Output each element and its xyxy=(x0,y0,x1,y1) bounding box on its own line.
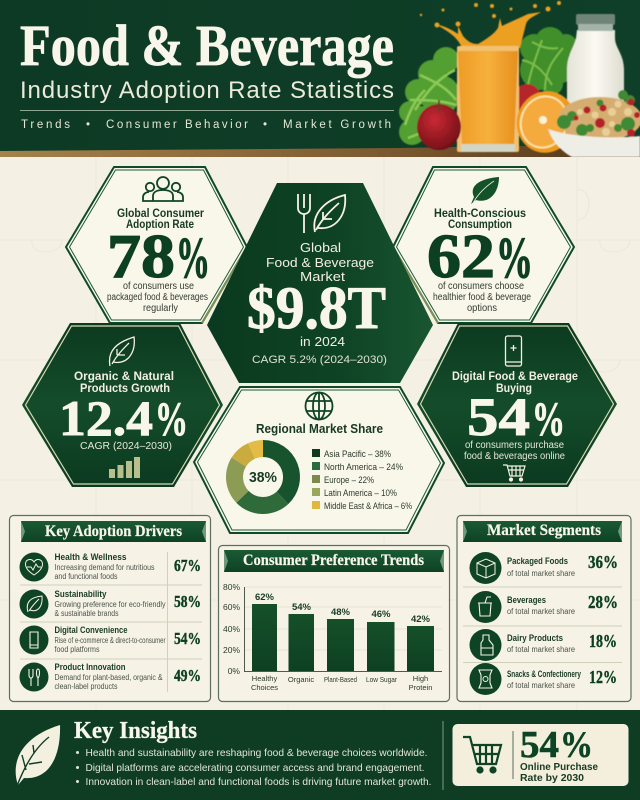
row: sustainability xyxy=(20,589,201,618)
panel: consumer preference trends xyxy=(218,546,450,702)
big number xyxy=(59,390,188,446)
donut centre value: 38% xyxy=(249,469,277,486)
lettuce left xyxy=(399,47,460,145)
row: dairy products xyxy=(470,629,617,661)
hexagon: digital buying xyxy=(417,323,617,487)
header tagline: • xyxy=(263,119,267,131)
description xyxy=(107,281,208,314)
insight bullets: Innovation in clean-label and functional foods is driving future market growth. xyxy=(86,776,432,788)
row: sustainability: Growing preference for eco-friendly xyxy=(54,600,166,609)
card title: Regional Market Share xyxy=(256,421,383,436)
row: snacks and confectionery: 12% xyxy=(589,667,617,687)
row: digital convenience: food platforms xyxy=(54,645,100,654)
header tagline xyxy=(21,119,391,131)
callout: online purchase rate: 54 xyxy=(520,724,559,766)
header tagline: Market Growth xyxy=(283,119,391,131)
bar chart: Low Sugar xyxy=(366,675,397,684)
hexagon: health-conscious consumption xyxy=(393,167,574,323)
description: of consumers choose xyxy=(438,281,524,292)
row: dairy products: 18% xyxy=(589,631,617,651)
hexagon: global consumer adoption rate xyxy=(66,167,247,323)
legend: Europe – 22% xyxy=(324,475,374,486)
big number xyxy=(107,223,210,291)
header tagline: Consumer Behavior xyxy=(106,119,248,131)
bar chart: Organic xyxy=(288,675,314,684)
card title: Food & Beverage xyxy=(266,255,374,270)
description: healthier food & beverage xyxy=(433,292,531,303)
card title xyxy=(74,371,174,395)
bowl xyxy=(548,129,640,157)
row: health and wellness: Increasing demand for nutritious xyxy=(54,563,154,572)
milk bottle xyxy=(567,14,624,112)
header subtitle: Industry Adoption Rate Statistics xyxy=(20,77,394,104)
card title: Market xyxy=(300,269,345,284)
banner heading xyxy=(224,550,444,572)
row: packaged foods: Packaged Foods xyxy=(507,556,568,566)
card title: Global xyxy=(300,240,341,255)
description: food & beverages online xyxy=(464,451,565,462)
row: digital convenience: 54% xyxy=(174,629,201,648)
big number: $9.8T xyxy=(247,275,386,341)
hexagon: global market xyxy=(207,183,433,383)
banner heading: Consumer Preference Trends xyxy=(243,552,424,569)
icon: globe xyxy=(306,392,332,420)
description xyxy=(433,281,531,314)
card title xyxy=(434,208,526,231)
icon: fork and leaf xyxy=(298,194,345,233)
legend: Latin America – 10% xyxy=(324,488,397,499)
big number: 12.4 xyxy=(59,390,153,446)
bar chart: Healthy xyxy=(252,674,277,683)
row: product innovation: 49% xyxy=(174,666,201,685)
legend: North America – 24% xyxy=(324,462,403,473)
row: health and wellness: and functional foods xyxy=(54,572,118,581)
CAGR note: CAGR (2024–2030) xyxy=(80,440,172,452)
juice glass xyxy=(457,46,519,152)
description: of consumers purchase xyxy=(465,440,564,451)
big number: 78 xyxy=(107,223,175,291)
callout: online purchase rate xyxy=(452,724,628,786)
bar chart: 48% xyxy=(331,607,351,618)
banner heading xyxy=(21,521,206,542)
row: dairy products: of total market share xyxy=(507,645,576,654)
icon: leaf xyxy=(16,725,60,786)
card title xyxy=(452,371,578,395)
hexagon: organic and natural growth xyxy=(22,323,223,487)
icon: cart xyxy=(503,465,525,481)
header title: Food & Beverage xyxy=(20,13,394,78)
row: product innovation: clean-label products xyxy=(54,682,118,691)
bar chart: 46% xyxy=(371,609,391,620)
row: health and wellness: Health & Wellness xyxy=(54,552,126,563)
row: sustainability: Sustainability xyxy=(54,589,107,600)
callout: online purchase rate: % xyxy=(560,725,593,766)
row: sustainability: 58% xyxy=(174,592,201,611)
apple back xyxy=(510,84,544,128)
bar chart: 80% xyxy=(223,582,240,592)
bar chart: High xyxy=(413,674,428,683)
bar chart: Choices xyxy=(251,683,278,692)
description: regularly xyxy=(143,303,178,314)
big number: % xyxy=(532,393,565,446)
card title: Buying xyxy=(496,383,532,395)
banner heading xyxy=(463,521,622,542)
big number: % xyxy=(155,393,188,446)
insight bullets: Digital platforms are accelerating consumer access and brand engagement. xyxy=(86,762,424,774)
row: packaged foods xyxy=(470,552,618,584)
icon: leaf xyxy=(471,177,499,204)
footer: key insights xyxy=(0,710,640,800)
juice splash xyxy=(420,1,561,48)
donut chart xyxy=(226,440,300,514)
legend: Middle East & Africa – 6% xyxy=(324,501,412,512)
row: snacks and confectionery: Snacks & Confectionery xyxy=(507,669,581,679)
header tagline: • xyxy=(86,119,90,131)
icon: bars xyxy=(109,457,140,478)
icon: phone xyxy=(506,336,522,366)
row: product innovation xyxy=(20,662,201,692)
description: packaged food & beverages xyxy=(107,292,208,303)
card title xyxy=(266,240,374,284)
bar chart: Protein xyxy=(409,683,432,692)
bar chart: 60% xyxy=(223,602,240,612)
card title: Health-Conscious xyxy=(434,208,526,220)
bar chart: 42% xyxy=(411,614,431,625)
header tagline: Trends xyxy=(21,119,70,131)
footer heading: Key Insights xyxy=(74,718,197,744)
bar chart: 54% xyxy=(292,602,312,613)
bar chart: 0% xyxy=(228,666,240,676)
card title: Adoption Rate xyxy=(126,219,194,231)
callout: online purchase rate: Online Purchase xyxy=(520,761,598,773)
row: digital convenience: Rise of e-commerce & direct-to-consumer xyxy=(54,636,166,645)
row: dairy products: Dairy Products xyxy=(507,633,563,643)
bar chart xyxy=(223,582,442,692)
row: product innovation: Product Innovation xyxy=(54,662,126,673)
apple front xyxy=(417,100,461,150)
card title xyxy=(117,208,204,231)
bar chart: 62% xyxy=(255,592,275,603)
big number xyxy=(467,387,565,447)
card title: Products Growth xyxy=(80,383,170,395)
bar chart: 40% xyxy=(223,624,240,634)
row: health and wellness xyxy=(20,552,201,582)
orange half xyxy=(508,83,584,161)
row: beverages: of total market share xyxy=(507,607,576,616)
row: health and wellness: 67% xyxy=(174,556,201,575)
card title: Organic & Natural xyxy=(74,371,174,383)
description: of consumers use xyxy=(123,281,194,292)
year: in 2024 xyxy=(300,334,345,349)
card title: Global Consumer xyxy=(117,208,204,220)
description: options xyxy=(467,303,497,314)
row: packaged foods: of total market share xyxy=(507,569,576,578)
food illustration xyxy=(399,1,640,161)
row: beverages: Beverages xyxy=(507,595,546,605)
row: sustainability: & sustainable brands xyxy=(54,609,118,618)
row: snacks and confectionery xyxy=(470,663,617,695)
header banner xyxy=(0,0,640,152)
legend xyxy=(312,449,412,512)
bar chart: Plant-Based xyxy=(324,675,357,684)
CAGR note: CAGR 5.2% (2024–2030) xyxy=(252,354,387,366)
big number xyxy=(427,223,533,291)
panel: market segments xyxy=(457,516,631,702)
big number: % xyxy=(176,225,210,290)
wooden table xyxy=(0,144,640,157)
row: beverages xyxy=(470,591,618,623)
row: digital convenience xyxy=(20,625,201,654)
row: digital convenience: Digital Convenience xyxy=(54,625,128,636)
panel: key adoption drivers xyxy=(10,516,210,702)
description xyxy=(464,440,565,462)
legend: Asia Pacific – 38% xyxy=(324,449,391,460)
big number: 54 xyxy=(467,387,530,447)
callout: online purchase rate: Rate by 2030 xyxy=(520,772,584,784)
salad xyxy=(557,90,640,141)
icon: leaf xyxy=(110,337,134,366)
icon: cart xyxy=(463,737,501,772)
card title: Consumption xyxy=(448,219,512,231)
lettuce right xyxy=(520,27,577,95)
bar chart: 20% xyxy=(223,645,240,655)
row: snacks and confectionery: of total market share xyxy=(507,681,576,690)
banner heading: Market Segments xyxy=(487,522,601,539)
icon: people xyxy=(143,177,183,201)
insight bullets xyxy=(76,747,432,788)
row: packaged foods: 36% xyxy=(588,552,618,572)
big number: % xyxy=(496,225,533,290)
banner heading: Key Adoption Drivers xyxy=(45,523,182,540)
row: beverages: 28% xyxy=(588,592,618,612)
hexagon: regional market share xyxy=(194,387,444,533)
card title: Digital Food & Beverage xyxy=(452,371,578,383)
insight bullets: Health and sustainability are reshaping food & beverage choices worldwide. xyxy=(86,747,428,759)
row: product innovation: Demand for plant-based, organic & xyxy=(54,673,163,682)
big number: 62 xyxy=(427,223,495,291)
